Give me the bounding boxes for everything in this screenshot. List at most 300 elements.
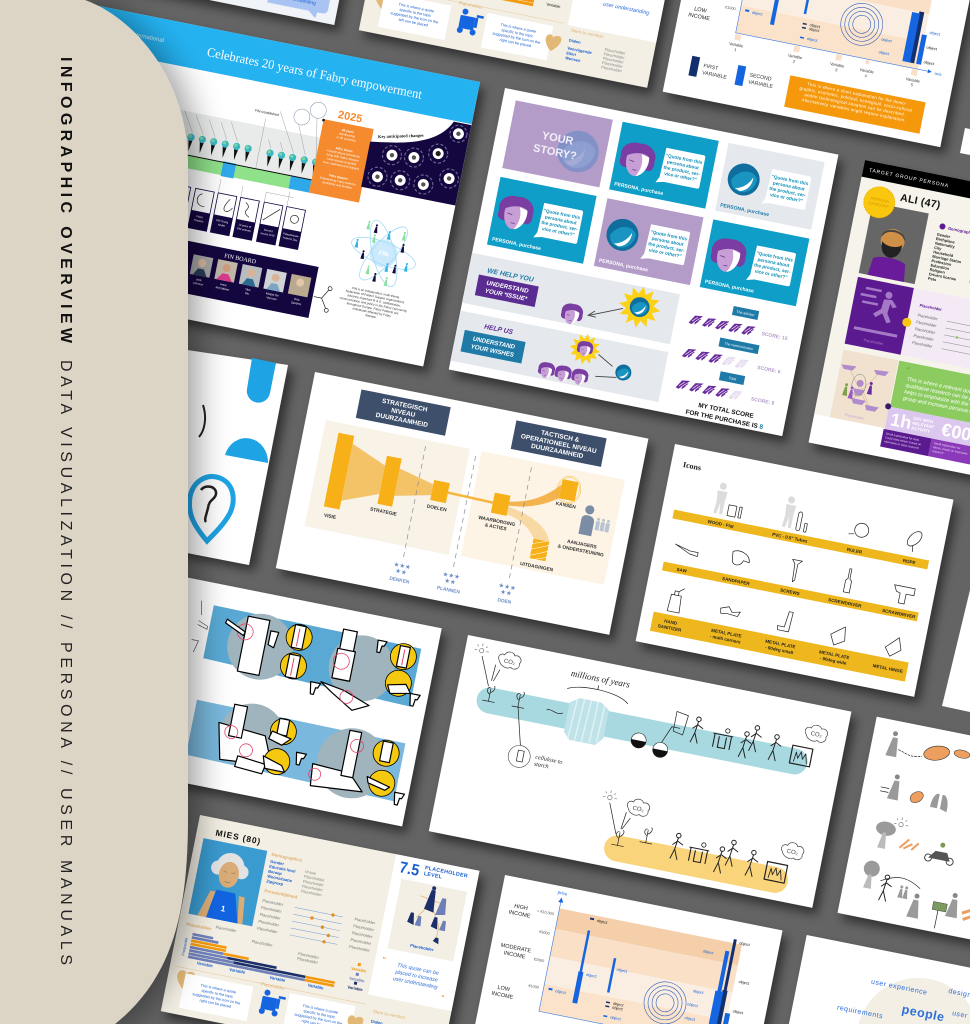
- FIN description paragraph: FIN is an independent, multi-theme: [352, 286, 400, 299]
- object labels: object: [806, 36, 819, 43]
- panel: persona quote teal 3: PERSONA, purchase: [704, 279, 754, 295]
- chart annotations: Placeholder: [251, 939, 274, 948]
- level indicator: PLACEHOLDER: [424, 865, 468, 880]
- slider block: Placeholder: [914, 326, 936, 335]
- icon: sandpaper: [731, 550, 751, 567]
- orange explanation box: Alternatively, variables might require explanation.: [801, 97, 906, 123]
- panel: persona quote teal 1: PERSONA, purchase: [614, 181, 664, 197]
- purple explanation panels: research: [932, 449, 944, 455]
- panel: persona quote grey: [715, 143, 825, 230]
- white right panel: [368, 854, 479, 1011]
- legend first variable: FIRST: [703, 63, 720, 72]
- demographics: Household: [933, 249, 954, 258]
- demographics: Beroep: [268, 869, 283, 876]
- card: Dutch sustainability funnel: [276, 372, 648, 635]
- card: income chart fragment at top right: 1: [734, 47, 738, 52]
- card: income chart fragment at top right: 4: [864, 73, 868, 78]
- chart legend: Variable: [351, 966, 368, 974]
- heart right: [346, 1015, 364, 1024]
- co2 top right: CO₂: [810, 731, 823, 739]
- chart legend: Variable: [347, 984, 364, 992]
- band labels row 3: HAND: [664, 618, 678, 626]
- frequency axis label: Frequentie: [181, 937, 189, 956]
- object labels: object: [555, 988, 567, 995]
- price ticks: > €10,000: [537, 909, 554, 916]
- panel: we help you: [462, 252, 680, 344]
- icon: ruler: [849, 521, 870, 538]
- object labels: object: [738, 979, 751, 986]
- funnel labels: & ONDERSTEUNING: [557, 543, 604, 559]
- demographics: Birthplace: [936, 236, 956, 245]
- step 1 tower: [217, 612, 281, 678]
- funnel labels: DOELEN: [426, 504, 448, 513]
- object labels: object: [881, 36, 893, 44]
- funnel labels: KANSEN: [555, 501, 577, 511]
- quote box right: right can be placed: [499, 38, 531, 48]
- card: user experience fragment at top: [50, 0, 373, 25]
- stem to mention: Placeholder: [603, 51, 626, 60]
- denken stars: DENKEN: [389, 576, 410, 586]
- purple explanation panels: Small explanation for: [933, 441, 961, 450]
- vertical title: [57, 57, 74, 965]
- demographics: Placeholder: [302, 883, 324, 893]
- bars: [570, 910, 745, 1024]
- quote: This quote can be: [397, 963, 439, 977]
- beige side shape: [0, 0, 188, 1024]
- bracket curve: [199, 405, 205, 437]
- uitdagingen square: [527, 538, 551, 563]
- axis: [736, 0, 945, 71]
- chart annotations: Placeholder: [215, 924, 238, 933]
- demographics: Drivers license: [928, 271, 957, 282]
- teal band figures: [689, 713, 815, 771]
- demographics: Woonsituatie: [267, 873, 293, 883]
- quote box left: This is where a quote: [200, 983, 236, 994]
- slider block: Placeholder: [354, 916, 377, 926]
- beige panel left: [305, 420, 470, 555]
- slider block: [912, 303, 970, 366]
- card: income chart fragment at top right: Variable: [830, 61, 846, 69]
- panel: persona quote grey: the product, ser-: [769, 186, 807, 198]
- band labels row 1: PVC - 0.5" Tubes: [772, 532, 808, 544]
- slider block: Placeholder: [353, 923, 375, 932]
- white quote panel: [568, 0, 667, 43]
- slider block: Placeholder: [917, 312, 939, 321]
- doen stars: ★★★: [498, 581, 517, 592]
- demographics: Education: [930, 262, 950, 271]
- icon: wood and person: [713, 482, 746, 518]
- slider block: Placeholder: [349, 944, 371, 953]
- chart annotations: Placeholder: [298, 951, 320, 960]
- quote: ": [381, 957, 386, 964]
- chart legend: [347, 962, 368, 992]
- step box text: FIN Young: [216, 218, 229, 224]
- legend variable: Variable: [546, 1, 562, 9]
- chart annotations: Placeholder: [297, 956, 319, 965]
- stem to mention: Placeholder: [603, 56, 625, 65]
- grey circles: [202, 608, 411, 804]
- doen stars: [495, 581, 517, 606]
- card: persona stories: [449, 88, 838, 436]
- panel: persona quote teal 3: [700, 219, 809, 306]
- band labels row 3: - 90deg small: [765, 645, 794, 655]
- card: income chart fragment at top right: 3: [835, 67, 839, 73]
- variable labels: Variable: [307, 982, 325, 991]
- icon: plate small: [777, 610, 793, 632]
- green timeline band: [114, 141, 291, 189]
- lilac stats strip: 1h: [889, 409, 913, 433]
- card: income chart fragment at top right: Variable: [788, 53, 803, 60]
- black header: [862, 160, 970, 235]
- quote box left: specific to the topic: [201, 989, 234, 999]
- band labels row 3: - multi corners: [709, 634, 742, 645]
- words: people: [901, 1002, 946, 1024]
- FIN board panel: Yibo: [245, 287, 251, 292]
- total score text: MY TOTAL SCORE: [698, 402, 755, 420]
- quote box left: suggested by the icon on the: [390, 11, 439, 24]
- millions of years note: millions of years: [570, 668, 631, 690]
- purple explanation panels: Could state where, based on: [885, 435, 922, 447]
- change icon rings: [366, 110, 469, 202]
- card: income chart fragment at top right: Variable: [859, 67, 875, 75]
- card: right edge fragments: [942, 128, 970, 712]
- panel: we help you: WE HELP YOU: [486, 268, 535, 284]
- stem to mention: Placeholder: [604, 47, 627, 56]
- sun and co2 top left: [468, 642, 523, 691]
- compressed strata: [563, 696, 610, 746]
- pin ring: [189, 477, 233, 541]
- score: communication: The communication: [724, 342, 754, 351]
- sun and co2 yellow band: CO₂: [632, 806, 645, 814]
- purple explanation panels: interviews or desk research: [884, 439, 920, 450]
- stem to mention: Placeholder: [601, 64, 623, 74]
- variable labels: [196, 960, 325, 991]
- panel: your story: YOUR: [541, 130, 574, 148]
- fossil flasks: [629, 704, 689, 761]
- pin leader lines: [170, 91, 324, 210]
- orange explanation box: graphic, economic, political, ecological, socio-cultural: [799, 85, 913, 113]
- quote: [376, 957, 450, 1002]
- panel: persona quote teal 3: persona about: [757, 257, 790, 268]
- demographics: Vrouw: [305, 869, 317, 876]
- green quote panel: ": [906, 367, 910, 374]
- doen stars: DOEN: [497, 597, 512, 606]
- panel: persona quote grey: "Quote from this: [771, 174, 809, 186]
- band labels row 3: - 90deg wide: [819, 656, 847, 666]
- band labels row 3: [657, 617, 904, 677]
- income labels: INCOME: [508, 910, 531, 920]
- key anticipated changes label: Key anticipated changes: [378, 133, 424, 139]
- object labels: object: [808, 26, 821, 33]
- demographics: Zipgroep: [266, 878, 284, 887]
- step box text: Fabry: [196, 214, 204, 219]
- persona category seal: CATEGORY: [868, 201, 890, 209]
- quote box left: specific to the topic: [399, 8, 432, 18]
- change icons: [371, 113, 465, 197]
- orange milestone panel: [308, 119, 374, 203]
- orange milestone panel: living with Fabry disease: [326, 152, 359, 163]
- chart annotations: [212, 924, 322, 965]
- stem to mention: [370, 1009, 431, 1024]
- stem to mention: Stem to mention: [372, 1009, 406, 1020]
- organisation label: International: [131, 32, 164, 44]
- orange explanation box: and/or technological situation can be described.: [804, 92, 906, 117]
- balloons: [292, 98, 328, 129]
- molecule connector: [311, 284, 333, 313]
- year 2025: 2025: [337, 109, 363, 126]
- demographics: Nationality: [935, 240, 956, 249]
- variable ticks: [734, 34, 918, 76]
- FIN description paragraph: communication and policy in the Fabry community: [339, 296, 408, 313]
- row 4 tree and people: [855, 859, 970, 937]
- funnel labels: AANJAGERS: [566, 539, 598, 551]
- frequency bars: [188, 933, 339, 987]
- bars tail: [498, 0, 534, 3]
- step box text: Adults: [218, 222, 226, 228]
- panel: your story: STORY?: [532, 142, 578, 163]
- parts list: [189, 600, 212, 654]
- legend second variable: VARIABLE: [748, 79, 774, 90]
- plannen stars: [436, 569, 464, 596]
- name: ALI (47): [899, 192, 942, 212]
- panel: persona quote teal 3: vice or other?": [754, 269, 788, 280]
- slider block: Placeholder: [919, 303, 943, 312]
- step box text: FIN network: [237, 226, 252, 233]
- slider block: [257, 898, 377, 953]
- rings: [837, 0, 886, 49]
- quote box left: right can be placed: [199, 999, 231, 1009]
- card: logo elements: [120, 340, 288, 565]
- panel: help us: [451, 308, 669, 402]
- quote: ": [440, 995, 445, 1002]
- step box text: Registry: [194, 218, 205, 224]
- purple explanation panels: [880, 429, 970, 491]
- card: income chart fragment at top right: €1000: [725, 5, 736, 11]
- card: carbon cycle sketch: [429, 635, 851, 908]
- quote box left: This is where a quote: [398, 2, 434, 13]
- funnel: [341, 443, 562, 542]
- demographics: Marriage Status: [932, 254, 962, 264]
- persona category seal: [861, 184, 898, 221]
- orange milestone panel: A world where individuals: [326, 148, 361, 159]
- card: income chart fragment at top right: 5: [910, 82, 914, 88]
- denken stars: ★★★: [393, 560, 412, 572]
- price ticks: €2000: [533, 957, 545, 963]
- quote box left: suggested by the icon on the: [192, 992, 241, 1005]
- network box: Placeholder: [410, 943, 434, 952]
- card: top persona fragment: [359, 0, 686, 88]
- denken stars: ★★: [395, 567, 408, 577]
- row 1 person and organ: [885, 730, 970, 771]
- level indicator: LEVEL: [423, 871, 443, 881]
- orange milestone panel: FIN's Mission: [329, 173, 349, 181]
- band labels row 3: METAL PLATE: [819, 649, 850, 660]
- object labels: object: [612, 1005, 624, 1012]
- object labels: object: [752, 10, 764, 17]
- orange milestone panel: in 30 countries: [336, 135, 357, 143]
- band labels row 2: [676, 567, 917, 620]
- income labels: INCOME: [491, 991, 514, 1001]
- card: people sketches: [838, 717, 970, 972]
- demographics: Placeholder: [301, 888, 323, 898]
- step box text: Second: [264, 228, 274, 233]
- purple explanation panels: above, based on interviews: [933, 445, 968, 456]
- question mark: [201, 487, 216, 522]
- band labels row 3: METAL PLATE: [711, 628, 742, 639]
- heart right: [544, 34, 562, 53]
- band labels row 2: SCREWS: [780, 588, 800, 596]
- panel: your story: [502, 100, 613, 187]
- FIN board panel: FIN BOARD: [224, 253, 257, 266]
- funnel labels: VISIE: [323, 513, 337, 521]
- subject line: DATA VISUALIZATION // PERSONA // USER MANUALS: [57, 360, 74, 965]
- bar: strategie: [377, 456, 402, 507]
- FIN atom network: FIN: [378, 251, 389, 258]
- slider block: Placeholder: [912, 340, 934, 349]
- panel: persona quote grey: PERSONA, purchase: [720, 202, 770, 218]
- tan network box: Placeholder: [844, 413, 865, 421]
- panel: persona quote teal 2: "Quote from this: [543, 208, 581, 220]
- timeline grey zone: [116, 99, 320, 180]
- quote: placed to increase: [394, 969, 438, 984]
- panel: help us: YOUR WISHES: [470, 343, 515, 359]
- score: total: Total: [728, 376, 737, 381]
- stem to mention: Stem to mention: [570, 28, 604, 39]
- variable labels: Variable: [229, 967, 246, 975]
- quote box right: specific to the topic: [303, 1009, 336, 1019]
- funnel labels: & ACTIES: [484, 522, 508, 533]
- slider block: Placeholder: [259, 912, 282, 921]
- step 3 tower: [211, 702, 282, 775]
- panel: persona quote lilac: persona about: [651, 236, 684, 247]
- change icon glyphs: [375, 117, 461, 193]
- object labels: object: [693, 988, 705, 995]
- panel: persona quote teal 2: [487, 177, 597, 264]
- score: advisor: The advisor: [736, 310, 756, 317]
- FIN board panel: McCallister: [215, 285, 230, 292]
- icon: pvc and person: [782, 496, 812, 532]
- outlined step boxes: [164, 184, 305, 250]
- plannen stars: PLANNEN: [436, 585, 461, 596]
- heart left: [175, 969, 196, 992]
- object labels: object: [596, 918, 609, 925]
- quote box right: suggested by the icon on the: [492, 31, 540, 45]
- demographics: Gender: [936, 232, 951, 239]
- milestone pins: [185, 133, 320, 177]
- axis: [539, 901, 753, 1024]
- portrait: 1: [220, 904, 227, 914]
- quote: user understanding: [392, 976, 438, 991]
- personality heading: Persoonlijkheid: [264, 888, 298, 900]
- persona portrait: [859, 202, 929, 284]
- panel: we help you: UNDERSTAND: [486, 280, 530, 295]
- card: word cloud: [768, 935, 970, 1024]
- bar: visie: [324, 433, 354, 509]
- words: user: [951, 1010, 968, 1020]
- stem to mention: Elleri: [566, 50, 577, 57]
- bands: [539, 908, 742, 1024]
- object labels: object: [586, 972, 598, 979]
- card: tool icons: [636, 444, 953, 697]
- axis arrow: [558, 897, 564, 903]
- slider block: Placeholder: [257, 925, 279, 935]
- demographics: Educatie level: [269, 864, 296, 874]
- demographics: Pets: [928, 276, 937, 282]
- income labels: MODERATE: [500, 943, 532, 955]
- FIN board panel: Vermeer: [266, 295, 277, 301]
- heading tactisch: DUURZAAMHEID: [530, 443, 584, 460]
- bold heading: INFOGRAPHIC OVERVIEW: [57, 57, 74, 344]
- network box: [388, 879, 467, 961]
- icon: sanitizer: [667, 586, 685, 613]
- panel: persona quote teal 1: [609, 122, 719, 209]
- stem to mention: Wensen: [565, 55, 581, 63]
- people icon: [578, 504, 613, 539]
- slider block: Placeholder: [916, 319, 938, 328]
- words: requirements: [836, 1004, 884, 1020]
- purple running panel: [845, 277, 914, 355]
- band labels row 3: METAL HINGE: [872, 663, 903, 674]
- sun and co2 top left: CO₂: [503, 659, 516, 667]
- score: communication: [682, 331, 785, 376]
- card: income chart fragment at top right: 2: [793, 59, 797, 64]
- quote box left: [179, 973, 253, 1021]
- drill icons: [290, 629, 433, 806]
- demographics: Religion: [929, 267, 946, 275]
- object labels: object: [612, 1001, 625, 1008]
- icon: hinge: [884, 635, 903, 658]
- scooter icon: [258, 989, 287, 1018]
- step box text: survey 2018: [260, 231, 275, 238]
- placeholder label: Placeholder: [459, 0, 484, 10]
- card: assembly manual: [128, 573, 442, 826]
- icon: plate wide: [829, 624, 847, 647]
- band labels row 1: WOOD - Flat: [707, 519, 735, 529]
- yellow dot: [902, 317, 912, 328]
- purple running panel: Placeholder: [863, 338, 884, 346]
- FIN board panel: Johnson: [192, 281, 204, 287]
- orange milestone panel: worldwide and families: [322, 180, 353, 190]
- object labels: object: [926, 45, 938, 52]
- orange milestone panel: Empowering Fabry patients: [320, 176, 357, 187]
- band labels row 1: RULER: [846, 547, 863, 555]
- demographics: Demographics: [271, 852, 303, 863]
- price label: price: [557, 890, 568, 897]
- orange milestone panel: 25 years: [342, 128, 354, 134]
- step 2 tower: [317, 627, 383, 713]
- FIN description paragraph: advance important R & D, collaboration,: [347, 293, 401, 308]
- panel: persona quote grey: vice or other?": [770, 192, 803, 203]
- panel: persona quote teal 1: vice or other?": [664, 171, 697, 182]
- object labels: object: [684, 1015, 696, 1022]
- card: Ali persona: [809, 160, 970, 501]
- purple explanation panels: Small explanation for stats: [885, 431, 920, 442]
- card: income chart: [466, 875, 783, 1024]
- panel: persona quote lilac: vice or other?": [648, 247, 682, 259]
- lilac stats strip: ACTIVITY: [911, 425, 931, 434]
- milestone label: FIN established: [255, 108, 279, 117]
- panel: help us: UNDERSTAND: [472, 336, 516, 351]
- heading strategisch: DUURZAAMHEID: [375, 412, 429, 429]
- stem to mention: Dialen: [568, 38, 582, 45]
- FIN board panel: Rick: [294, 297, 301, 302]
- quote box right: This is where a quote: [500, 23, 536, 34]
- quote box right: [481, 13, 553, 60]
- scooter icon: [456, 8, 485, 37]
- panel: persona quote teal 2: PERSONA, purchase: [491, 236, 542, 252]
- blue band 1: [202, 605, 422, 707]
- FIN description paragraph: [337, 284, 410, 325]
